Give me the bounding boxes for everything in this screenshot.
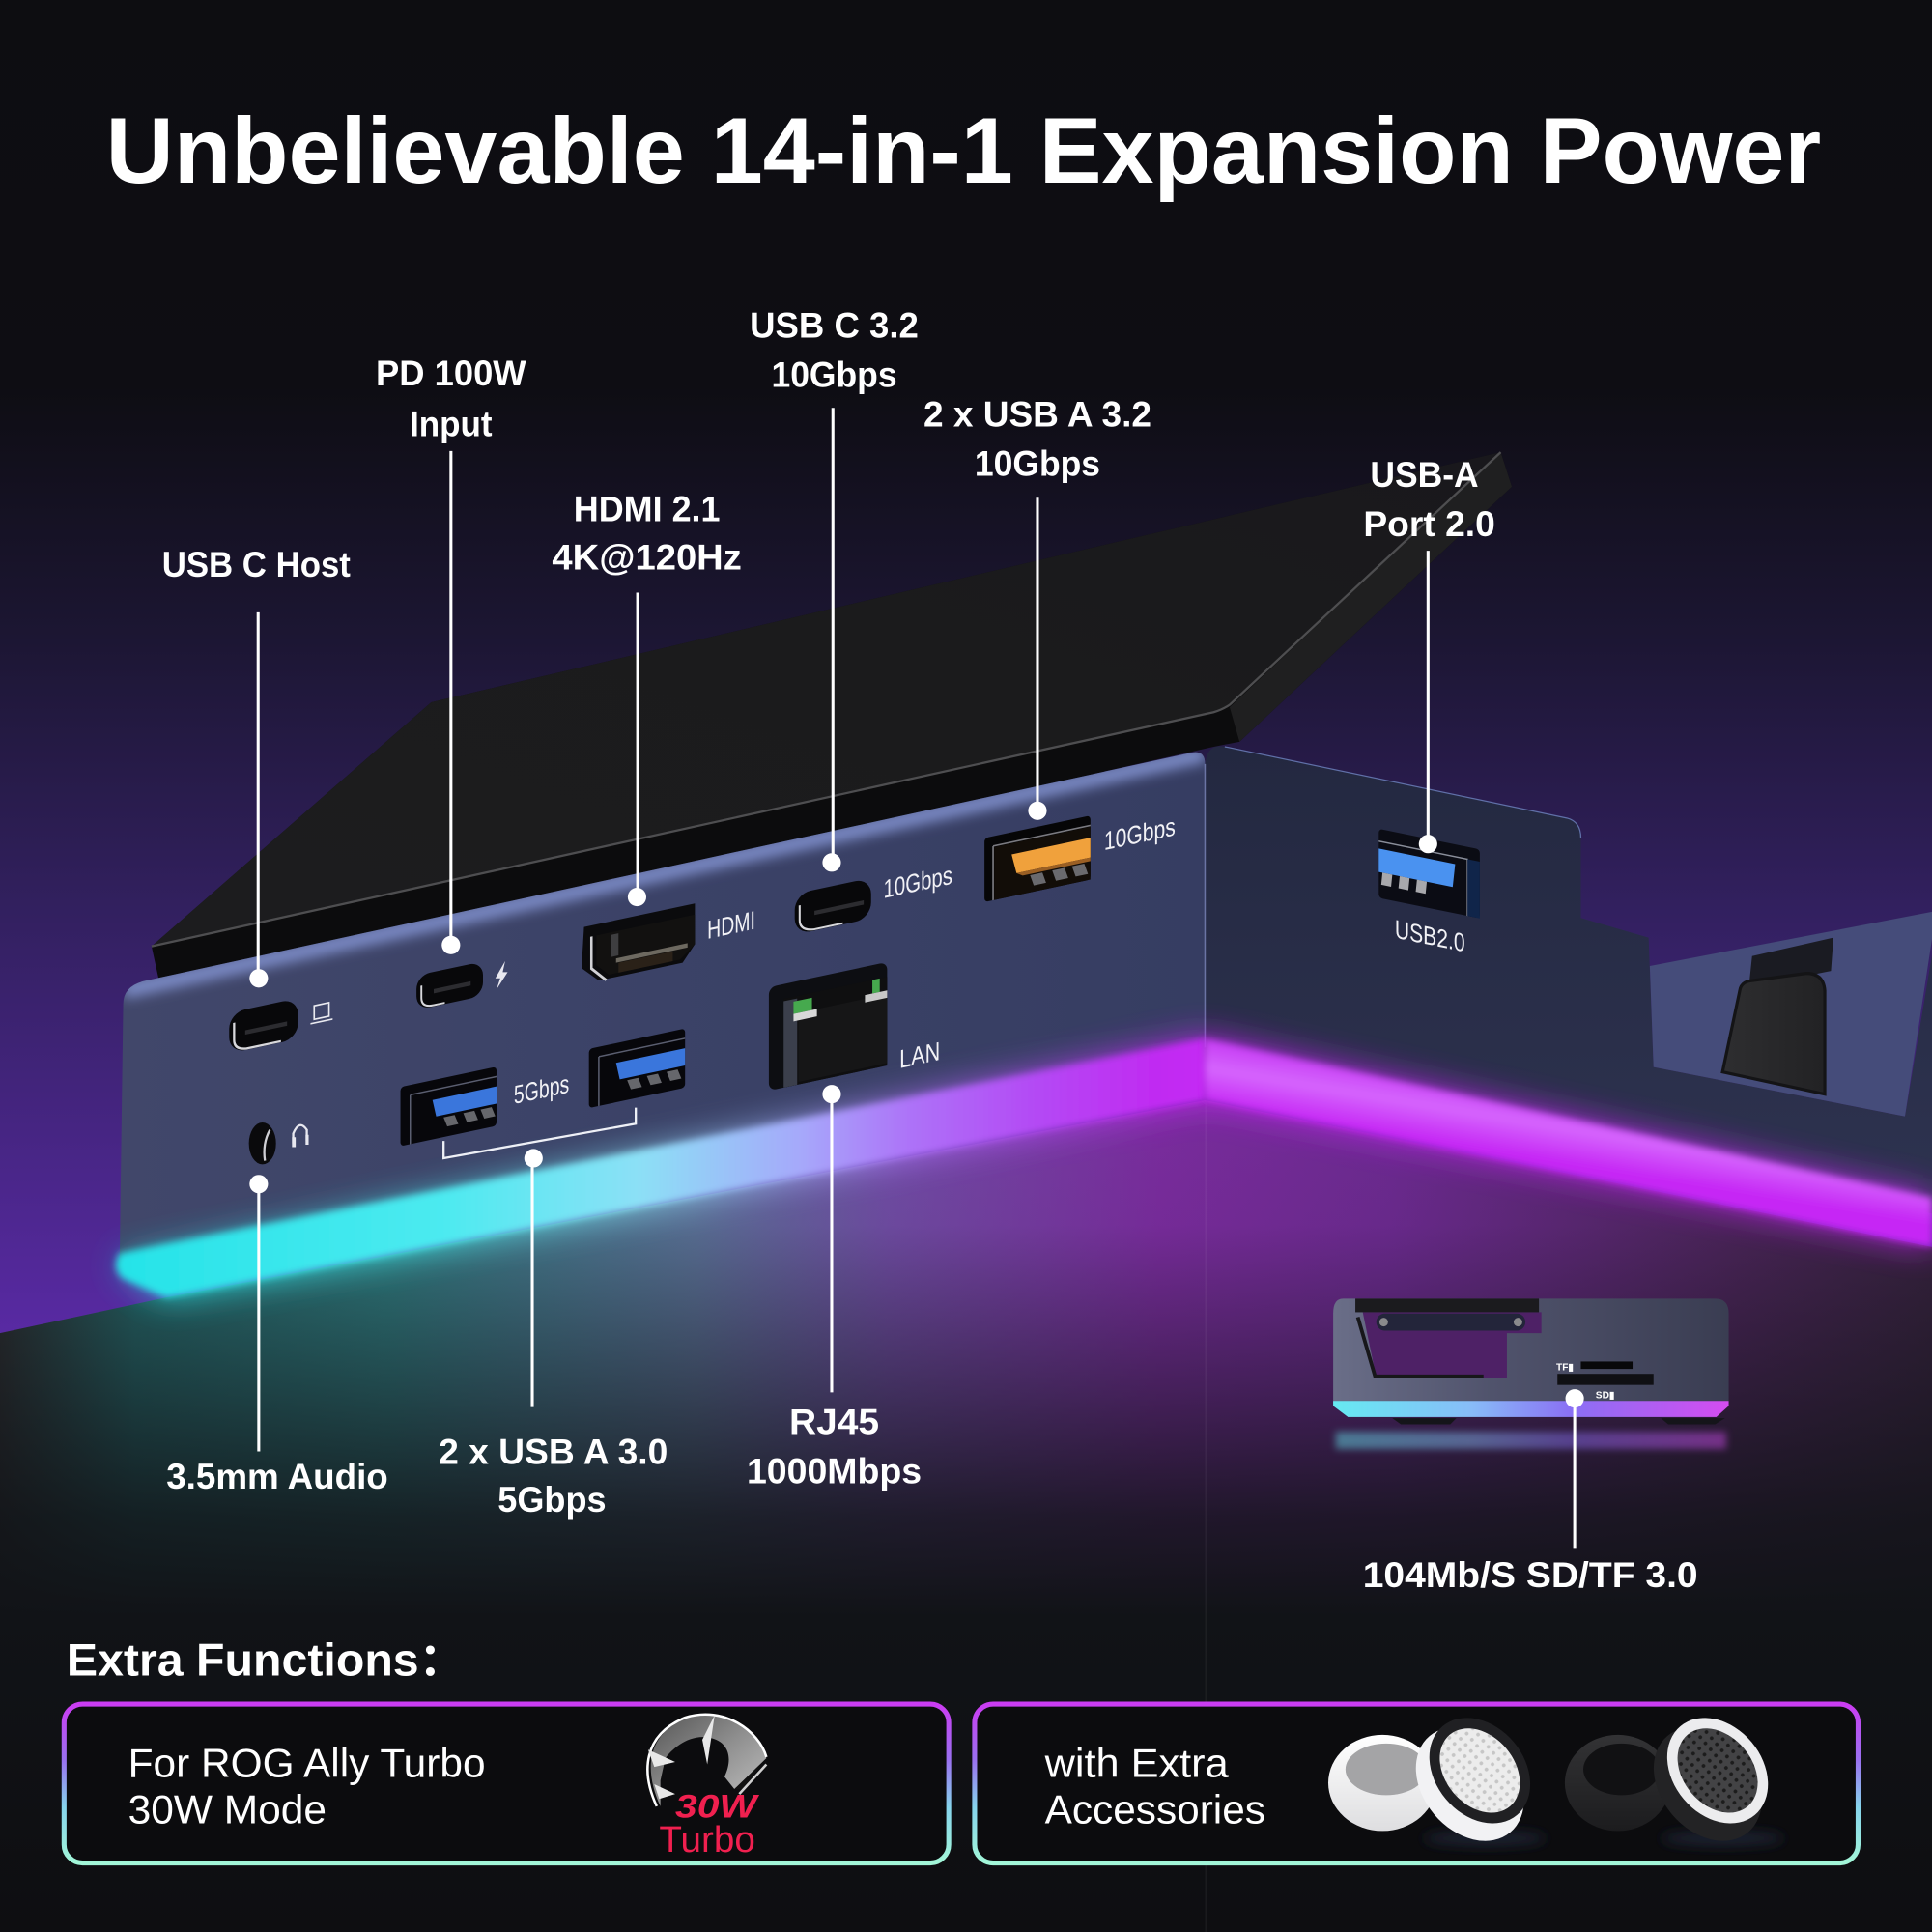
SD slot	[1557, 1374, 1654, 1385]
label: USB C 3.2: USB C 3.2	[750, 305, 919, 345]
LED glow	[116, 1037, 1932, 1297]
text: with Extra Accessories: Accessories	[1045, 1787, 1265, 1833]
port: USB A 5Gbps left	[401, 1066, 497, 1147]
side recess panel	[1650, 912, 1932, 1117]
cutout	[1363, 1312, 1542, 1378]
panel: turbo mode	[64, 1704, 949, 1863]
port: USB C host	[229, 998, 298, 1053]
top plate of the dock	[152, 452, 1512, 985]
port: USB A 10Gbps	[984, 815, 1091, 902]
label: USB C 3.2	[750, 305, 919, 395]
text: Turbo: Turbo	[659, 1819, 755, 1861]
label: HDMI 2.1	[552, 490, 742, 577]
label: 2 x USB A 3.2: 2 x USB A 3.2	[923, 394, 1151, 434]
LED strip side	[1205, 1038, 1932, 1247]
port: LAN	[769, 962, 887, 1091]
port: USB 2.0 side	[1378, 829, 1480, 919]
port: HDMI	[582, 903, 695, 985]
recess slot	[1747, 938, 1833, 1003]
TF slot	[1580, 1361, 1633, 1369]
hinge bar	[1377, 1314, 1525, 1331]
heading: Extra Functions: Extra Functions	[67, 1635, 419, 1687]
text: with Extra Accessories	[1044, 1740, 1265, 1833]
label: RJ45: RJ45	[789, 1403, 879, 1442]
table surface with light reflection	[0, 1100, 1932, 1932]
label: USB-A Port 2.0: Port 2.0	[1363, 504, 1495, 544]
label: 2 x USB A 3.2	[923, 394, 1151, 483]
port: USB C 3.2	[795, 878, 871, 935]
dock front face	[120, 753, 1205, 1269]
icon: bolt	[496, 961, 508, 989]
label: 104Mb/S SD/TF 3.0: 104Mb/S SD/TF 3.0	[1363, 1555, 1698, 1595]
label: HDMI 2.1: 4K@120Hz	[552, 537, 742, 577]
recess clip	[1722, 974, 1825, 1094]
text: For ROG Ally Turbo: For ROG Ally Turbo	[128, 1740, 486, 1785]
bracket	[443, 1108, 636, 1158]
label: 3.5mm Audio: 3.5mm Audio	[166, 1457, 388, 1496]
label: LAN: LAN	[899, 1036, 940, 1074]
label: 10Gbps: 10Gbps	[1104, 811, 1176, 856]
port: audio jack	[249, 1122, 276, 1164]
reflection	[1336, 1432, 1726, 1449]
port: PD 100W	[416, 961, 483, 1010]
label: RJ45: 1000Mbps	[747, 1452, 922, 1492]
label: 5Gbps: 5Gbps	[514, 1068, 569, 1110]
title: Unbelievable 14-in-1 Expansion Power	[106, 98, 1821, 203]
label: USB2.0: USB2.0	[1395, 915, 1465, 957]
label: USB C Host: USB C Host	[162, 545, 351, 584]
text: 30W: 30W	[675, 1788, 759, 1825]
icon: black thumb grips	[1565, 1697, 1789, 1862]
label: 2 x USB A 3.0	[439, 1432, 668, 1520]
icon: headphones	[292, 1125, 309, 1148]
label: USB C 3.2: 10Gbps	[771, 355, 897, 395]
mini dock front view	[1333, 1298, 1729, 1449]
label: TF: TF▮	[1556, 1362, 1574, 1373]
LED strip front	[116, 1038, 1205, 1297]
callout lines and dots	[249, 408, 1437, 1452]
dock side face	[1205, 746, 1932, 1213]
text: For ROG Ally Turbo	[128, 1740, 486, 1833]
label: 2 x USB A 3.0: 2 x USB A 3.0	[439, 1432, 668, 1471]
icon: laptop	[310, 1002, 332, 1024]
label: PD 100W Input: Input	[410, 405, 493, 444]
label: HDMI 2.1: HDMI 2.1	[574, 490, 721, 529]
SD/TF callout line	[1566, 1389, 1584, 1548]
label: 10Gbps: 10Gbps	[884, 860, 952, 904]
label: RJ45	[747, 1403, 922, 1492]
label: PD 100W Input: PD 100W	[376, 354, 526, 393]
label: USB-A Port 2.0: USB-A	[1370, 455, 1479, 495]
heading: Extra Functions: ：	[419, 1635, 465, 1687]
text: For ROG Ally Turbo: 30W Mode	[128, 1787, 327, 1833]
top bar	[1355, 1298, 1539, 1312]
feet	[1392, 1418, 1725, 1424]
icon: turbo gauge	[647, 1715, 766, 1806]
label: USB-A Port 2.0	[1363, 455, 1495, 544]
label: SD: SD▮	[1596, 1391, 1615, 1402]
icon: white thumb grips	[1328, 1697, 1551, 1862]
panel: extra accessories	[975, 1697, 1858, 1863]
label: 2 x USB A 3.2: 10Gbps	[975, 443, 1100, 483]
port: USB A 5Gbps right	[589, 1029, 685, 1108]
mini LED	[1333, 1401, 1729, 1417]
label: PD 100W Input	[376, 354, 526, 444]
label: 2 x USB A 3.0: 5Gbps	[497, 1480, 607, 1520]
label: HDMI: HDMI	[707, 905, 755, 945]
text: with Extra Accessories: with Extra	[1044, 1740, 1229, 1785]
